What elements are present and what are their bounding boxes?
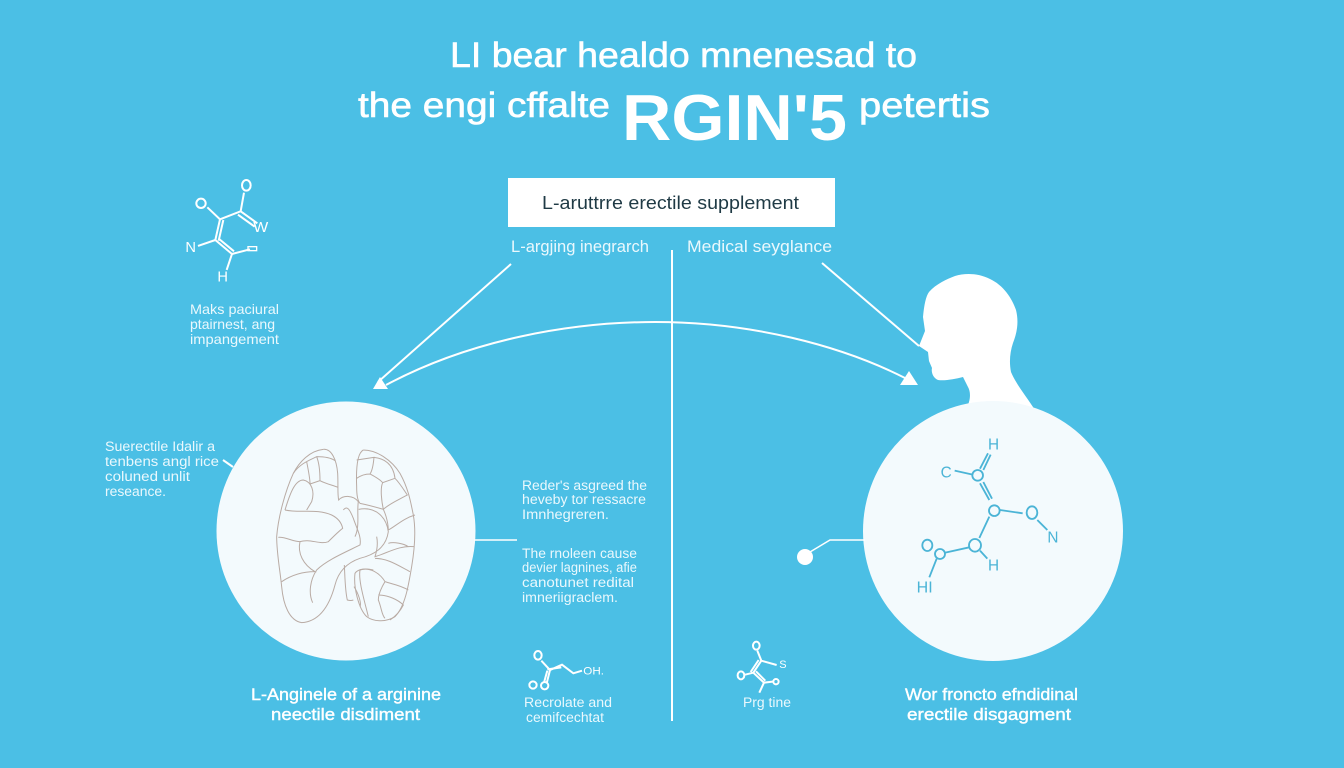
text block: top left note: [190, 301, 279, 347]
caption: right circle: [905, 685, 1078, 724]
icon: small molecule bottom centre right: [738, 642, 787, 693]
central divider: [671, 250, 673, 721]
text block: left callout: Suerectile Idalir a: [105, 439, 216, 454]
text block: left callout: coluned unlit: [105, 469, 190, 484]
title: LI bear healdo mnenesad to: [450, 36, 917, 75]
icon: molecule: N: [1047, 530, 1058, 547]
caption: left circle: L-Anginele of a arginine: [251, 685, 441, 704]
text block: top left note: Maks paciural: [190, 301, 279, 317]
text block: bottom centre left: [524, 695, 612, 725]
text block: middle upper: Reder's asgreed the: [522, 478, 647, 493]
text block: middle lower: The rnoleen cause: [522, 546, 637, 561]
text block: top left note: impangement: [190, 331, 279, 347]
icon: molecule: H: [988, 558, 999, 575]
text block: left callout: reseance.: [105, 484, 166, 499]
icon: lungs: [277, 449, 415, 623]
branch labels: Medical seyglance: [687, 237, 832, 256]
arrow: left diagonal: [373, 264, 511, 389]
arrow: arc between panels: [386, 322, 918, 385]
text block: left callout: tenbens angl rice: [105, 454, 219, 469]
panel: right circle with molecule: [863, 401, 1123, 661]
icon: molecule top left: N: [185, 240, 196, 256]
title: RGIN'5: [622, 81, 847, 154]
arrow: right diagonal: [822, 263, 919, 346]
caption: right circle: Wor froncto efndidinal: [905, 685, 1078, 704]
text block: middle lower: imneriigraclem.: [522, 590, 618, 605]
text block: bottom centre left: cemifcechtat: [526, 710, 604, 725]
heading box: L-aruttrre erectile supplement: [542, 193, 799, 213]
icon: molecule: C: [941, 464, 952, 481]
text block: middle lower: [522, 546, 637, 605]
icon: molecule: [917, 436, 1058, 597]
text block: bottom centre left: Recrolate and: [524, 695, 612, 710]
caption: right circle: erectile disgagment: [907, 705, 1071, 724]
text block: bottom centre right: Prg tine: [743, 695, 791, 710]
icon: small molecule bottom centre right: S: [779, 659, 787, 671]
text block: middle lower: devier lagnines, afie: [522, 560, 637, 575]
text block: left callout: [105, 439, 219, 499]
connector: dot to right circle: [797, 540, 865, 565]
heading box: [508, 178, 835, 227]
connector: left callout to circle: [223, 460, 233, 467]
icon: human head silhouette: [919, 274, 1035, 410]
icon: small molecule bottom centre left: [529, 651, 604, 689]
branch labels: L-argjing inegrarch: [511, 237, 649, 256]
connector: left circle to middle text: [474, 539, 517, 541]
icon: molecule: HI: [917, 580, 933, 597]
title: petertis: [859, 86, 990, 125]
text block: top left note: ptairnest, ang: [190, 316, 275, 332]
icon: molecule top left: H: [217, 269, 228, 285]
title: [358, 36, 990, 154]
caption: left circle: neectile disdiment: [271, 705, 420, 724]
text block: middle upper: Imnhegreren.: [522, 507, 609, 522]
text block: middle lower: canotunet redital: [522, 575, 634, 590]
text block: middle upper: [522, 478, 647, 522]
icon: molecule top left: W: [253, 220, 268, 236]
title: the engi cffalte: [358, 86, 610, 125]
caption: left circle: [251, 685, 441, 724]
panel: left circle with lungs: [216, 402, 476, 660]
branch labels: [511, 237, 832, 256]
text block: middle upper: heveby tor ressacre: [522, 492, 646, 507]
icon: molecule top left: [185, 180, 268, 285]
icon: small molecule bottom centre left: OH.: [583, 666, 604, 678]
icon: molecule: H: [988, 436, 999, 453]
